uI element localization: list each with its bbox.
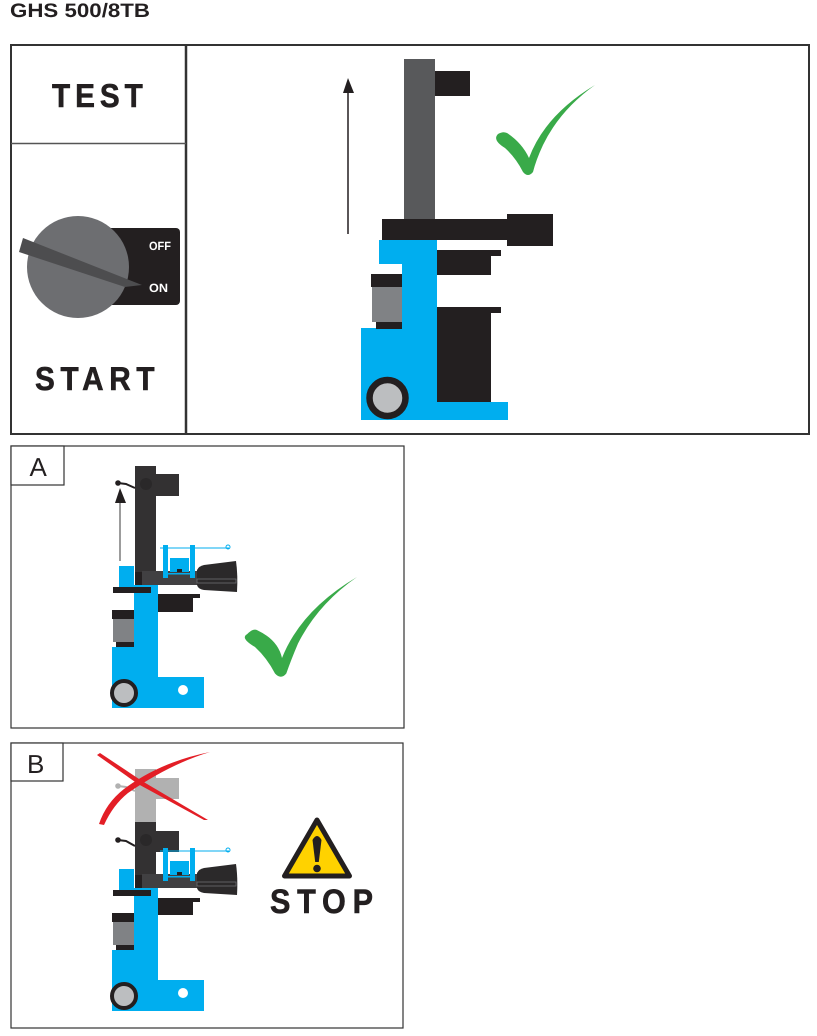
panel: test start <box>11 45 809 434</box>
heading: start: START <box>35 360 160 397</box>
title: GHS 500/8TB <box>10 0 150 22</box>
heading: test: TEST <box>52 77 148 114</box>
arrow: up <box>343 78 354 234</box>
panel: B <box>11 743 403 1028</box>
icon: red cross <box>97 752 210 825</box>
arrow: up <box>115 488 126 561</box>
machine: log splitter <box>112 466 237 708</box>
machine: ghost raised position <box>115 769 179 822</box>
label: A: A <box>30 452 48 482</box>
icon: green check <box>496 85 595 175</box>
icon: rotary switch: OFF <box>149 239 171 253</box>
machine: log splitter raised <box>361 59 553 420</box>
icon: green check <box>245 577 357 677</box>
machine: log splitter <box>112 822 237 1011</box>
heading: stop: STOP <box>270 883 380 921</box>
icon: rotary switch <box>19 216 180 318</box>
panel: A <box>11 446 404 728</box>
icon: warning triangle <box>284 820 350 876</box>
label: B: B <box>27 749 44 779</box>
icon: rotary switch: ON <box>149 281 168 295</box>
label: A <box>11 446 64 485</box>
label: B <box>11 743 63 781</box>
